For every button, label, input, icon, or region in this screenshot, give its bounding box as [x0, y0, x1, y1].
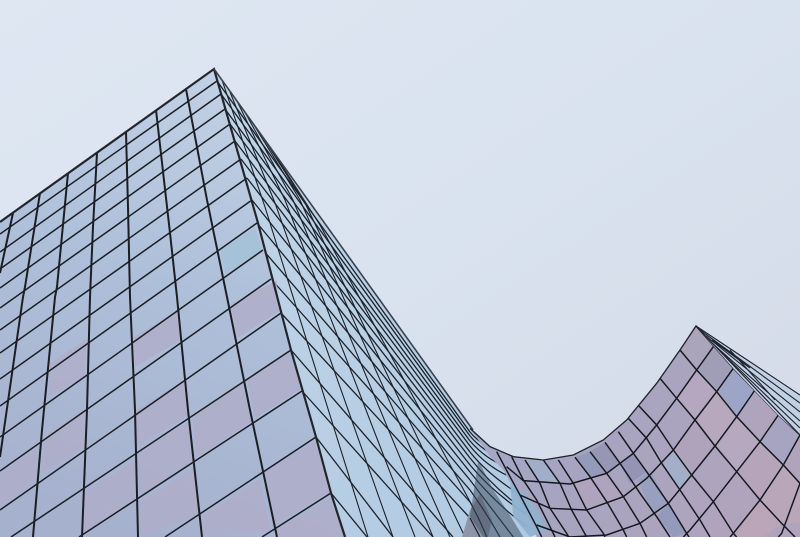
- tinted glass panels: [0, 280, 343, 537]
- dark floor lines wrapping into curve: [470, 432, 530, 537]
- cross lines of the curve: [497, 350, 800, 537]
- grey reflection at the foot of side face: [462, 494, 492, 537]
- curved mauve face: [470, 326, 800, 537]
- roofline and corner edge: [0, 69, 345, 537]
- tinted panels on curve: [525, 326, 800, 537]
- grid along the curve: [507, 347, 800, 537]
- curve top edge: [470, 326, 800, 460]
- dark tree reflection: [470, 460, 523, 537]
- far right thin face: [696, 326, 800, 435]
- mullions on main face: [0, 89, 277, 537]
- mullion lines on side face: [222, 80, 480, 537]
- left main glass face: [0, 69, 347, 537]
- floor lines on main face: [0, 81, 331, 537]
- outer profile of side face: [214, 69, 473, 430]
- thin side face of tower: [214, 69, 530, 537]
- mauve surface: [470, 326, 800, 537]
- teal reflecting panel: [220, 228, 263, 274]
- teal glass reflection: [510, 483, 547, 537]
- floor lines on side face: [217, 81, 470, 537]
